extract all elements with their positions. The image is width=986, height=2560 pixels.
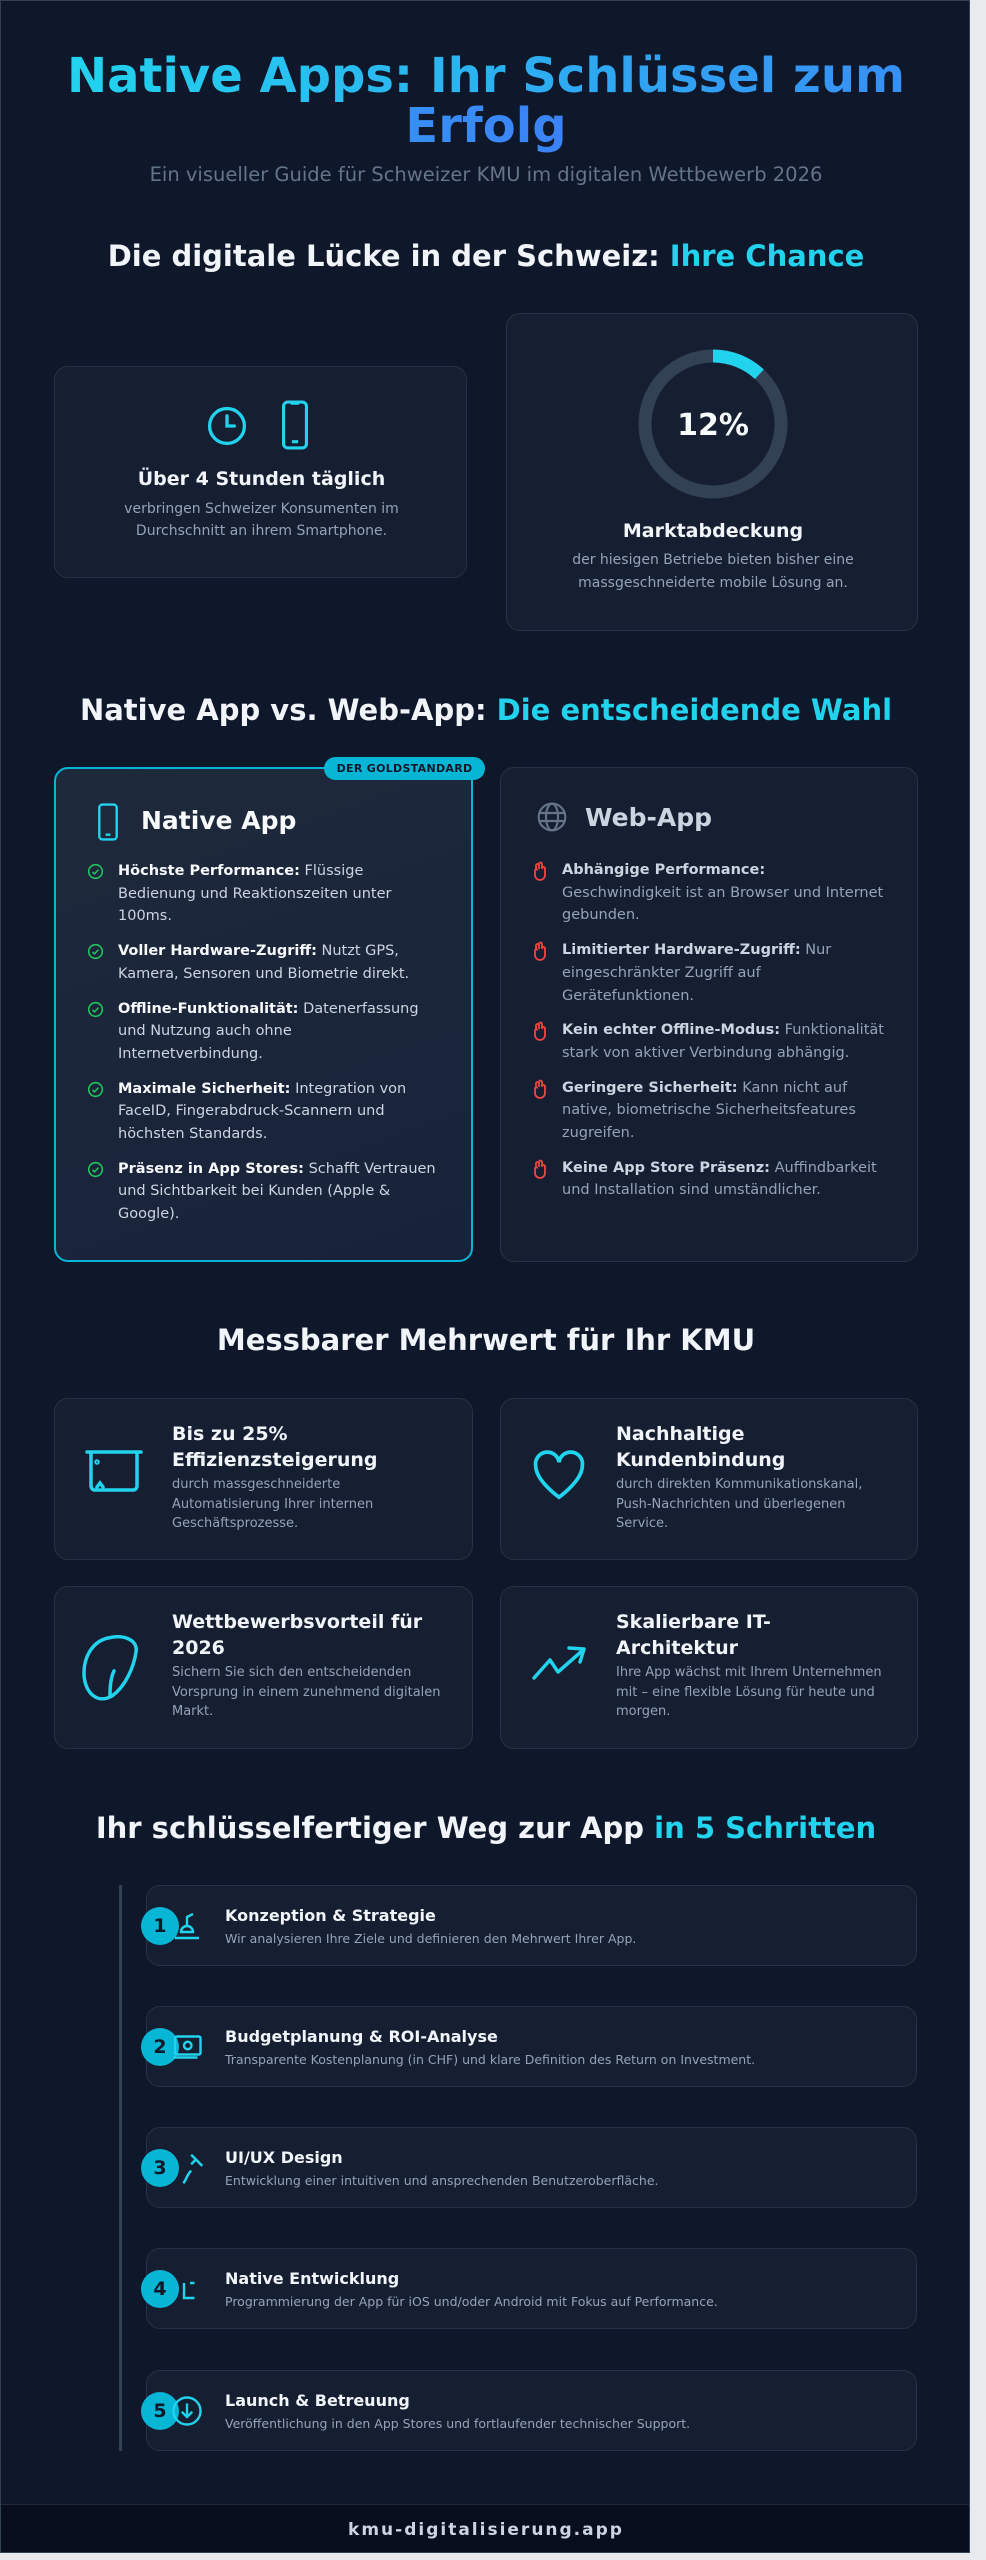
- list: disadvantages: native, biometrische Sicherheitsfeatures: [562, 1102, 856, 1118]
- icon: money: [174, 2035, 202, 2059]
- step 1: Konzeption & Strategie: [225, 1906, 436, 1925]
- badge: DER GOLDSTANDARD: [337, 762, 472, 775]
- list: disadvantages: und Installation sind umständlicher.: [562, 1182, 821, 1198]
- step 5: Veröffentlichung in den App Stores und fortlaufender technischer Support.: [225, 2416, 690, 2431]
- panel: market coverage: [506, 313, 918, 631]
- heading: 5 Schritte: Ihr schlüsselfertiger Weg zur App in 5 Schritten: [96, 1811, 876, 1845]
- stat text: der hiesigen Betriebe bieten bisher eine: [572, 552, 854, 568]
- panel: smartphone usage: [54, 366, 467, 578]
- title: [67, 48, 905, 154]
- list: disadvantages: Kein echter Offline-Modus: Funktionalität: [562, 1022, 884, 1038]
- icon: download: [172, 2396, 202, 2426]
- list: disadvantages: Abhängige Performance:: [562, 862, 765, 878]
- heading: Web-App: [585, 803, 712, 832]
- list: advantages: Google).: [118, 1206, 179, 1222]
- stat text: Marktabdeckung: [623, 520, 803, 542]
- step 2: Budgetplanung & ROI-Analyse: [225, 2027, 498, 2046]
- stat text: [124, 468, 399, 539]
- list: advantages: 100ms.: [118, 908, 172, 924]
- stat text: Über 4 Stunden täglich: [138, 468, 385, 490]
- list: disadvantages: eingeschränkter Zugriff auf: [562, 965, 761, 981]
- step 2: [146, 2006, 917, 2087]
- icon: efficiency: [85, 1450, 143, 1492]
- icon: phone: [98, 803, 118, 841]
- panel: efficiency: [54, 1398, 473, 1560]
- panel: scalable architecture: [500, 1586, 918, 1749]
- stat text: massgeschneiderte mobile Lösung an.: [578, 575, 848, 591]
- step 3: [146, 2127, 917, 2208]
- step 4: 4: [153, 2278, 167, 2300]
- stat text: [572, 520, 854, 591]
- list: advantages: und Nutzung auch ohne: [118, 1023, 292, 1039]
- list: advantages: Internetverbindung.: [118, 1046, 263, 1062]
- text: [616, 1611, 882, 1719]
- list: disadvantages: stark von aktiver Verbindung abhängig.: [562, 1045, 849, 1061]
- text: Sichern Sie sich den entscheidenden Vorsprung in einem zunehmend digitalen Markt.: [172, 1665, 441, 1719]
- list: advantages: und Sichtbarkeit bei Kunden (Apple &: [118, 1183, 390, 1199]
- panel: competitive advantage: [54, 1586, 473, 1749]
- icon: heart: [534, 1450, 584, 1500]
- list: advantages: Präsenz in App Stores: Schafft Vertrauen: [118, 1161, 436, 1177]
- text: Wettbewerbsvorteil für 2026: [172, 1611, 422, 1659]
- text: Ihre App wächst mit Ihrem Unternehmen mit – eine flexible Lösung für heute und morgen.: [616, 1665, 882, 1719]
- step 3: Entwicklung einer intuitiven und ansprechenden Benutzeroberfläche.: [225, 2173, 658, 2188]
- panel: native app: [54, 767, 473, 1262]
- step 5: Launch & Betreuung: [225, 2391, 410, 2410]
- list: advantages: Offline-Funktionalität: Datenerfassung: [118, 1001, 419, 1017]
- list: advantages: höchsten Standards.: [118, 1126, 267, 1142]
- step 4: Native Entwicklung: [225, 2269, 399, 2288]
- icon: phone: [282, 400, 308, 450]
- list: disadvantages: [534, 862, 884, 1198]
- list: disadvantages: Limitierter Hardware-Zugriff: Nur: [562, 942, 831, 958]
- text: [172, 1423, 378, 1531]
- step 1: Wir analysieren Ihre Ziele und definieren den Mehrwert Ihrer App.: [225, 1931, 636, 1946]
- text: durch direkten Kommunikationskanal, Push-Nachrichten und überlegenen Service.: [616, 1477, 862, 1531]
- heading: Native App: [141, 806, 296, 835]
- list: disadvantages: gebunden.: [562, 907, 640, 923]
- title: Erfolg: [405, 98, 567, 154]
- text: Bis zu 25% Effizienzsteigerung: [172, 1423, 378, 1471]
- subtitle: Ein visueller Guide für Schweizer KMU im digitalen Wettbewerb 2026: [150, 163, 822, 186]
- icon: design: [182, 2154, 203, 2184]
- list: advantages: FaceID, Fingerabdruck-Scannern und: [118, 1103, 385, 1119]
- list: advantages: Maximale Sicherheit: Integration von: [118, 1081, 406, 1097]
- list: disadvantages: Geringere Sicherheit: Kann nicht auf: [562, 1080, 847, 1096]
- list: advantages: Voller Hardware-Zugriff: Nutzt GPS,: [118, 943, 399, 959]
- step 1: [146, 1885, 917, 1966]
- icon: code: [182, 2282, 194, 2300]
- timeline line: [119, 1885, 122, 2451]
- list: advantages: Höchste Performance: Flüssige: [118, 863, 363, 879]
- list: advantages: Kamera, Sensoren und Biometrie direkt.: [118, 966, 409, 982]
- donut chart 12%: [638, 350, 788, 498]
- footer: [1, 2504, 971, 2554]
- list: disadvantages: Gerätefunktionen.: [562, 988, 694, 1004]
- heading: Mehrwert: Messbarer Mehrwert für Ihr KMU: [217, 1323, 755, 1357]
- heading: digitale Lücke: Die digitale Lücke in der Schweiz: Ihre Chance: [108, 239, 864, 273]
- step 1: 1: [153, 1915, 167, 1937]
- icon: leaf: [82, 1635, 138, 1700]
- badge: [324, 757, 485, 780]
- list: advantages: Bedienung und Reaktionszeiten unter: [118, 886, 391, 902]
- icon: clock: [208, 406, 246, 446]
- panel: customer loyalty: [500, 1398, 918, 1560]
- step 4: [146, 2248, 917, 2329]
- step 2: Transparente Kostenplanung (in CHF) und klare Definition des Return on Investment.: [225, 2052, 755, 2067]
- text: [616, 1423, 862, 1531]
- step 3: 3: [153, 2157, 167, 2179]
- list: disadvantages: Geschwindigkeit ist an Browser und Internet: [562, 885, 883, 901]
- step 5: 5: [153, 2400, 167, 2422]
- panel: web app: [500, 767, 918, 1262]
- icon: globe: [538, 802, 566, 832]
- list: advantages: [88, 863, 436, 1222]
- title: Native Apps: Ihr Schlüssel zum: [67, 48, 905, 104]
- text: Skalierbare IT-Architektur: [616, 1611, 771, 1659]
- footer: kmu-digitalisierung.app: [348, 2520, 624, 2540]
- heading: Native vs Web: Native App vs. Web-App: Die entscheidende Wahl: [80, 693, 892, 727]
- stat text: verbringen Schweizer Konsumenten im: [124, 501, 399, 517]
- step 5: [146, 2370, 917, 2451]
- donut chart 12%: 12%: [677, 408, 749, 443]
- step 4: Programmierung der App für iOS und/oder Android mit Fokus auf Performance.: [225, 2294, 718, 2309]
- icon: strategy: [175, 1912, 199, 1940]
- text: [172, 1611, 441, 1719]
- icon: trend arrow: [532, 1646, 586, 1680]
- stat text: Durchschnitt an ihrem Smartphone.: [136, 523, 387, 539]
- text: Nachhaltige Kundenbindung: [616, 1423, 785, 1471]
- text: durch massgeschneiderte Automatisierung Ihrer internen Geschäftsprozesse.: [172, 1477, 373, 1531]
- list: disadvantages: zugreifen.: [562, 1125, 634, 1141]
- step 2: 2: [153, 2036, 167, 2058]
- list: disadvantages: Keine App Store Präsenz: Auffindbarkeit: [562, 1160, 877, 1176]
- step 3: UI/UX Design: [225, 2148, 343, 2167]
